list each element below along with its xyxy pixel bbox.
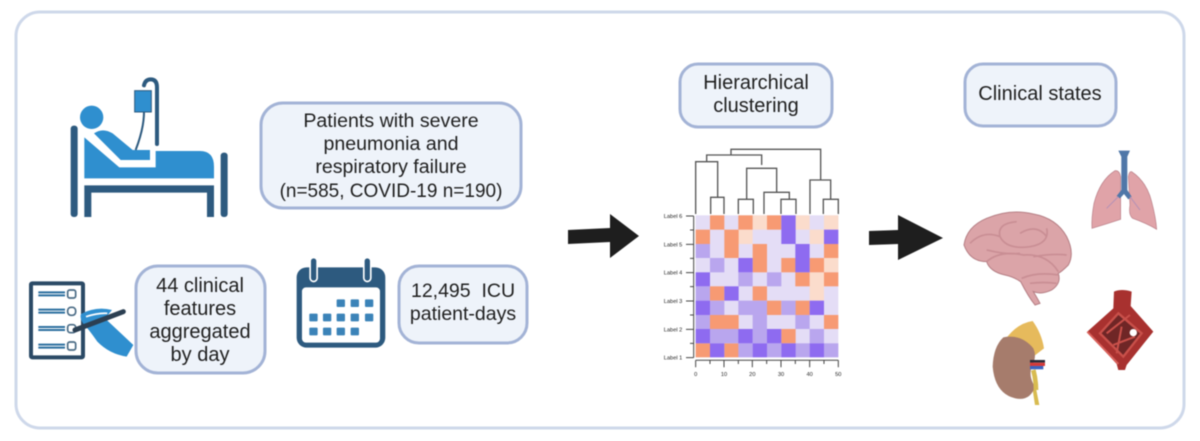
icon: patient in hospital bed xyxy=(71,79,228,217)
chart: dendrogram and heatmap: 10 xyxy=(721,372,727,378)
heatmap axis labels: Label 5 xyxy=(664,242,682,248)
heatmap grid xyxy=(696,215,838,357)
chart: dendrogram and heatmap: 30 xyxy=(778,372,784,378)
text box: ICU patient-days: patient-days xyxy=(410,303,516,325)
text box: ICU patient-days: 12,495 ICU xyxy=(411,280,515,302)
heatmap axes xyxy=(686,216,838,367)
text box: clinical features: aggregated xyxy=(149,321,251,343)
heatmap axis labels xyxy=(664,214,682,362)
text box: clinical features xyxy=(136,266,265,373)
arrow: to clustering xyxy=(568,214,639,258)
icon: heart xyxy=(1087,290,1153,370)
text box: clinical features: 44 clinical xyxy=(156,275,244,297)
heatmap axis labels: Label 2 xyxy=(664,327,682,333)
heatmap axis labels: Label 4 xyxy=(664,271,682,277)
chart: dendrogram and heatmap xyxy=(664,149,841,378)
chart: dendrogram and heatmap: 20 xyxy=(749,372,755,378)
text box: patients: Patients with severe xyxy=(303,110,479,132)
heatmap axis labels: Label 6 xyxy=(664,214,682,220)
text box: patients: respiratory failure xyxy=(315,156,467,178)
text box: patients xyxy=(261,103,521,208)
arrow: to clinical states xyxy=(869,215,943,260)
heading: hierarchical clustering: Hierarchical xyxy=(703,72,809,94)
icon: lungs xyxy=(1092,151,1157,229)
heading: hierarchical clustering: clustering xyxy=(713,95,799,117)
icon: brain xyxy=(964,212,1071,305)
heading: hierarchical clustering xyxy=(680,64,832,127)
text box: patients: (n=585, COVID-19 n=190) xyxy=(280,181,502,202)
heatmap axis labels: Label 3 xyxy=(664,299,682,305)
text box: clinical features: by day xyxy=(171,344,229,366)
heading: clinical states xyxy=(965,64,1116,126)
chart: dendrogram and heatmap: 50 xyxy=(835,372,841,378)
heading: clinical states: Clinical states xyxy=(978,83,1102,105)
chart: dendrogram and heatmap: 0 xyxy=(694,372,697,378)
icon: calendar xyxy=(297,258,385,348)
heatmap axis labels: Label 1 xyxy=(664,356,682,362)
icon: kidney xyxy=(993,321,1045,405)
text box: clinical features: features xyxy=(164,298,236,320)
dendrogram xyxy=(696,149,838,214)
chart: dendrogram and heatmap: 40 xyxy=(807,372,813,378)
text box: patients: pneumonia and xyxy=(323,133,459,155)
text box: ICU patient-days xyxy=(399,266,527,343)
icon: checklist with hand xyxy=(31,283,133,357)
